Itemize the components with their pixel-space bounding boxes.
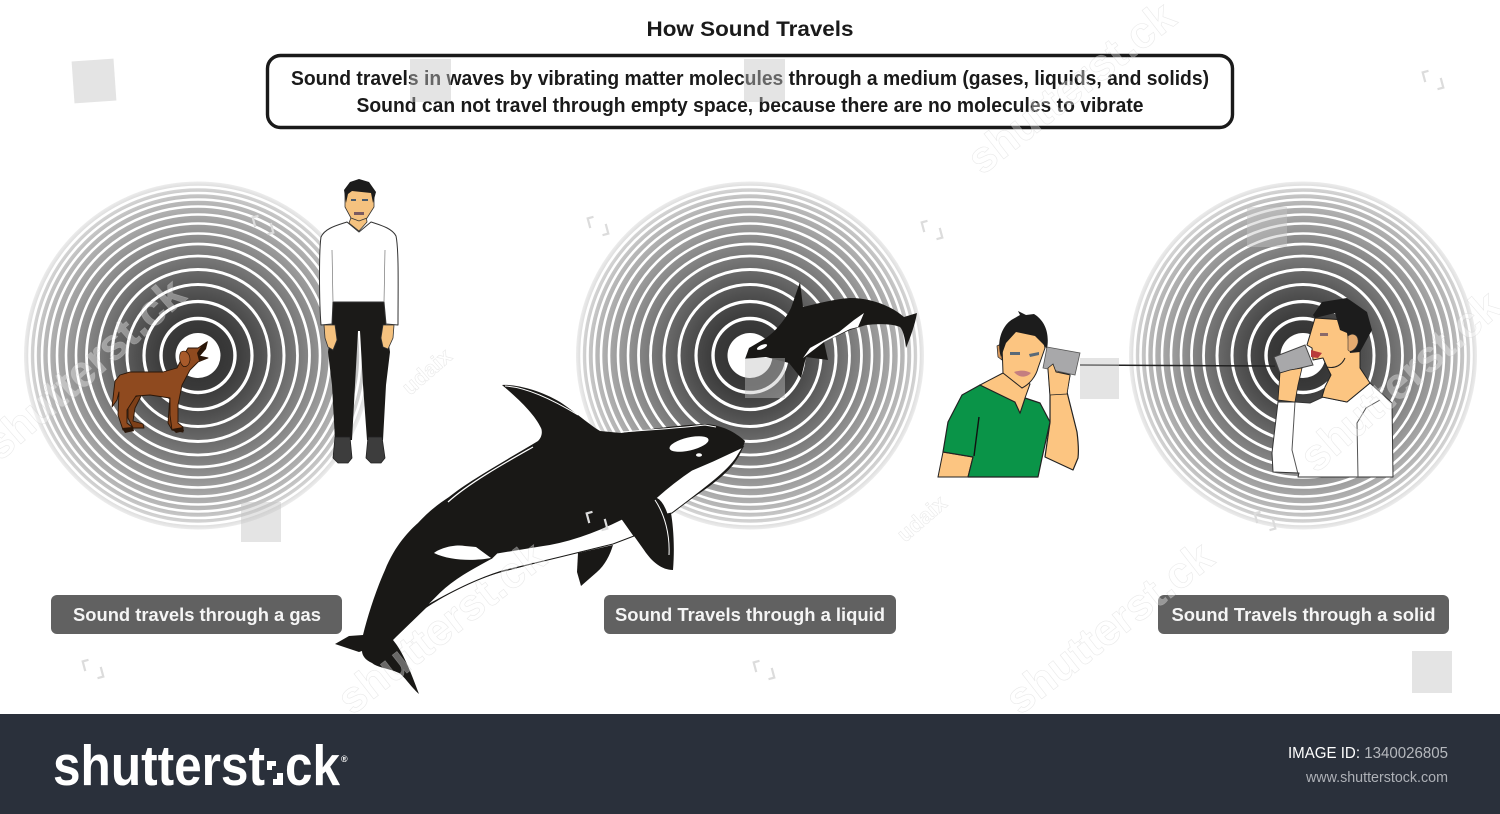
lower fin xyxy=(577,545,613,586)
hand xyxy=(1278,368,1302,402)
head xyxy=(1002,328,1045,388)
eye patch xyxy=(756,343,768,351)
label: solid: Sound Travels through a solid xyxy=(1172,604,1436,625)
sound waves: gas xyxy=(24,181,372,530)
string xyxy=(1080,365,1275,366)
icon: standing man xyxy=(320,179,398,463)
body xyxy=(335,385,745,694)
mouth xyxy=(1311,350,1322,358)
hair xyxy=(1313,298,1372,353)
label: solid xyxy=(1158,595,1449,634)
belly xyxy=(803,313,864,358)
neck xyxy=(349,215,367,231)
ear xyxy=(180,351,190,367)
watermark text: udaix xyxy=(397,343,457,400)
hair xyxy=(999,311,1048,357)
label: liquid xyxy=(604,595,896,634)
white chin xyxy=(656,447,743,514)
icon: listening man xyxy=(938,311,1080,477)
watermark text: udaix xyxy=(892,490,952,547)
left hand xyxy=(324,325,337,350)
shutterstock logo: shutterst xyxy=(53,734,265,798)
trousers xyxy=(328,302,390,440)
watermark squares xyxy=(72,59,1452,693)
watermark marks xyxy=(83,68,1443,682)
title: How Sound Travels xyxy=(646,17,854,41)
paws xyxy=(122,427,184,433)
label: gas: Sound travels through a gas xyxy=(73,604,321,625)
can xyxy=(1043,347,1080,375)
neck xyxy=(980,373,1030,413)
definition box: Sound travels in waves by vibrating matter molecules through a medium (gases, liquids, and solids) xyxy=(291,68,1209,90)
sound waves: solid xyxy=(1128,181,1478,530)
can xyxy=(1274,345,1313,373)
footer bar xyxy=(0,714,1500,814)
website: www.shutterstock.com xyxy=(1305,770,1448,786)
eye patch xyxy=(668,433,710,455)
shirt xyxy=(320,222,398,325)
hand xyxy=(1048,364,1070,395)
right hand xyxy=(381,325,394,349)
left upper arm xyxy=(938,452,973,477)
icon: small orca xyxy=(745,282,917,378)
eye xyxy=(1320,333,1328,336)
body xyxy=(112,342,208,432)
face xyxy=(1014,371,1031,377)
hair xyxy=(344,179,376,203)
arm xyxy=(1045,368,1078,470)
jaw line xyxy=(1327,358,1345,368)
far legs xyxy=(128,394,180,430)
shutterstock logo: ® xyxy=(341,754,348,764)
shutterstock logo: ck xyxy=(285,734,340,798)
shoes xyxy=(333,437,385,463)
head xyxy=(345,190,374,221)
ear xyxy=(1348,334,1358,351)
image id: IMAGE ID: 1340026805 xyxy=(1288,745,1448,762)
watermark text: shutterst.ck xyxy=(328,531,555,724)
highlights xyxy=(448,447,533,502)
green shirt xyxy=(943,385,1050,477)
neck and face xyxy=(1307,318,1370,402)
icon: large orca xyxy=(335,385,745,694)
mouth xyxy=(197,341,208,361)
shirt xyxy=(1272,383,1393,477)
definition box: Sound can not travel through empty space, because there are no molecules to vibrate xyxy=(356,95,1144,117)
ear xyxy=(997,344,1002,360)
definition box xyxy=(268,56,1232,128)
flank patch xyxy=(434,545,491,560)
watermark text: shutterst.ck xyxy=(996,531,1223,724)
white belly xyxy=(426,519,634,606)
icon: speaking man xyxy=(1272,298,1393,477)
label: liquid: Sound Travels through a liquid xyxy=(615,604,885,625)
label: gas xyxy=(51,595,342,634)
icon: barking dog xyxy=(112,341,208,433)
sound waves: liquid xyxy=(576,181,924,530)
face xyxy=(354,212,364,215)
